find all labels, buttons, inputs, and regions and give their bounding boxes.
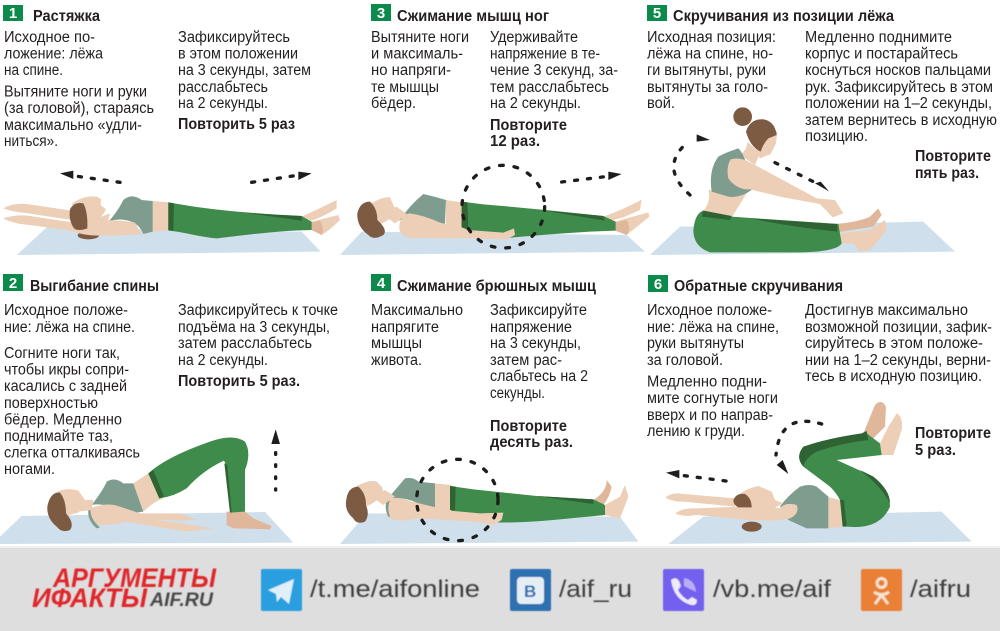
text: start position 4: напрягите <box>371 319 439 336</box>
logo: AIF: AIF.RU <box>149 590 214 611</box>
text: instructions 6: тесь в исходную позицию. <box>805 368 982 385</box>
text: hold instructions 2: подъёма на 3 секунды, <box>178 319 330 336</box>
link: odnoklassniki: /aifru <box>910 576 971 603</box>
text: hold instructions 3: на 2 секунды. <box>490 95 581 112</box>
icon: vk: В <box>524 582 536 601</box>
callout: dashed circle abdomen <box>417 459 498 541</box>
panel: exercise 3 leg muscle squeeze <box>340 4 649 255</box>
text: start position 5: вытянуты за голо- <box>647 79 768 96</box>
text: start position 6 <box>647 302 779 440</box>
text: instructions 6 <box>805 302 992 385</box>
text: start position 5: лёжа на спине, но- <box>647 46 773 62</box>
arrow: stretch left <box>60 171 120 182</box>
text: instructions 5: позицию. <box>805 128 868 145</box>
text: repeat 6 <box>915 425 991 459</box>
text: hold instructions 1: в этом положении <box>178 46 298 62</box>
text: start position 2: бёдер. Медленно <box>4 412 122 428</box>
text: start position 1 <box>4 29 154 150</box>
arrow: stretch left 6 <box>666 470 726 481</box>
text: start position 2 <box>4 302 140 478</box>
text: start position 1: ниться». <box>4 133 58 150</box>
badge 1 <box>3 5 23 22</box>
text: instructions 5: положении на 1–2 секунды, <box>805 95 992 112</box>
text: start position 3 <box>371 29 469 112</box>
text: hold instructions 3: Повторите <box>490 117 567 134</box>
text: hold instructions 1: расслабьтесь <box>178 79 268 96</box>
icon: viber <box>663 569 704 611</box>
illustration: woman seated reaching for toes <box>650 107 955 255</box>
text: hold instructions 3: напряжение в те- <box>490 46 600 62</box>
text: start position 6: мите согнутые ноги <box>647 390 778 407</box>
text: start position 2: касались с задней <box>4 378 127 395</box>
icon: telegram <box>261 569 302 611</box>
logo: AIF: ИФАКТЫ <box>32 583 148 613</box>
panel: footer band <box>0 546 1000 631</box>
illustration: woman in glute bridge <box>0 437 293 544</box>
text: start position 6: Медленно подни- <box>647 374 767 390</box>
text: start position 1: (за головой), стараясь <box>4 100 154 117</box>
arrow: curved torso rise <box>674 134 710 195</box>
text: start position 2: Исходное положе- <box>4 302 128 319</box>
text: repeat 6: Повторите <box>915 425 991 442</box>
badge 3 <box>371 4 391 22</box>
illustration: woman lying, abs squeeze <box>340 478 638 544</box>
text: start position 1: Вытяните ноги и руки <box>4 84 147 100</box>
text: start position 6: вверх и по направ- <box>647 407 773 424</box>
text: hold instructions 4: слабьтесь на 2 <box>490 368 588 385</box>
heading: exercise 4: Сжимание брюшных мышц <box>397 278 596 295</box>
text: start position 6: руки вытянуты <box>647 335 744 352</box>
badge 6: 6 <box>654 276 662 293</box>
text: start position 2: слегка отталкиваясь <box>4 444 140 462</box>
text: start position 3: и максималь- <box>371 46 463 62</box>
text: hold instructions 1: на 2 секунды. <box>178 95 268 112</box>
text: instructions 5: Медленно поднимите <box>805 29 952 46</box>
text: hold instructions 4: Зафиксируйте <box>490 302 587 319</box>
logo: AIF: АРГУМЕНТЫ <box>52 563 217 593</box>
text: start position 4: Максимально <box>371 302 463 319</box>
logo: AIF <box>32 563 217 613</box>
arrow: reach forward <box>775 163 829 191</box>
badge 5: 5 <box>653 5 661 22</box>
badge 4 <box>371 274 391 292</box>
text: hold instructions 1: Повторить 5 раз <box>178 116 295 133</box>
text: start position 2: Согните ноги так, <box>4 345 120 362</box>
illustration: woman lifting bent legs <box>665 402 972 544</box>
text: start position 1: ложение: лёжа <box>4 46 103 62</box>
illustration: woman stretching on mat <box>3 196 340 255</box>
panel: exercise 5 sit-up twist <box>647 5 997 255</box>
icon: odnoklassniki <box>861 569 902 611</box>
badge 5 <box>647 5 667 22</box>
text: hold instructions 4: Повторите <box>490 418 567 435</box>
text: instructions 6: сируйтесь в этом положе- <box>805 335 983 352</box>
text: start position 3: но напряги- <box>371 62 451 79</box>
text: start position 2: ние: лёжа на спине. <box>4 319 135 336</box>
text: hold instructions 1: Зафиксируйтесь <box>178 29 290 46</box>
icon: vk <box>510 569 551 611</box>
heading: exercise 3: Сжимание мышц ног <box>397 8 550 25</box>
text: hold instructions 2: на 2 секунды. <box>178 352 268 369</box>
text: hold instructions 4: десять раз. <box>490 434 573 451</box>
text: start position 2: поднимайте таз, <box>4 428 113 445</box>
text: start position 4: мышцы <box>371 335 422 352</box>
badge 2: 2 <box>9 275 17 292</box>
text: hold instructions 2 <box>178 302 338 390</box>
badge 2 <box>3 274 23 292</box>
text: start position 6: Исходное положе- <box>647 302 772 319</box>
heading: exercise 2: Выгибание спины <box>30 278 159 295</box>
heading: exercise 6: Обратные скручивания <box>674 278 843 295</box>
text: start position 1: Исходное по- <box>4 29 95 46</box>
text: start position 4 <box>371 302 463 369</box>
text: instructions 5 <box>805 29 997 145</box>
text: repeat 5: пять раз. <box>915 165 979 182</box>
text: start position 5: вой. <box>647 95 675 112</box>
text: hold instructions 2: затем расслабьтесь <box>178 335 312 352</box>
text: repeat 5: Повторите <box>915 148 991 165</box>
text: start position 3: Вытяните ноги <box>371 29 469 46</box>
text: repeat 5 <box>915 148 991 182</box>
arrow: curved legs toward chest <box>776 421 822 474</box>
text: start position 1: максимально «удли- <box>4 117 142 134</box>
arrow: stretch right <box>252 172 312 182</box>
text: hold instructions 2: Зафиксируйтесь к точке <box>178 302 338 319</box>
heading: exercise 5: Скручивания из позиции лёжа <box>673 8 894 25</box>
text: hold instructions 4: на 3 секунды, <box>490 335 581 352</box>
panel: exercise 6 reverse crunch <box>647 275 992 544</box>
text: start position 2: поверхностью <box>4 395 98 412</box>
text: instructions 6: нии на 1–2 секунды, верни- <box>805 352 991 369</box>
illustration: woman lying, thigh squeeze <box>340 194 649 255</box>
text: hold instructions 2: Повторить 5 раз. <box>178 373 300 390</box>
text: start position 6: ние: лёжа на спине, <box>647 319 779 336</box>
panel: exercise 1 stretch <box>3 5 340 255</box>
heading: exercise 1: Растяжка <box>33 8 100 25</box>
link: vk: /aif_ru <box>559 576 632 603</box>
badge 4: 4 <box>377 275 386 292</box>
text: hold instructions 3: чение 3 секунд, за- <box>490 62 618 79</box>
panel: exercise 4 abdominal squeeze <box>340 274 638 544</box>
text: hold instructions 1 <box>178 29 311 133</box>
text: instructions 5: корпус и постарайтесь <box>805 46 958 62</box>
text: hold instructions 4 <box>490 302 588 451</box>
link: viber: /vb.me/aif <box>713 576 831 603</box>
text: hold instructions 3: 12 раз. <box>490 133 540 150</box>
text: hold instructions 3: Удерживайте <box>490 29 578 46</box>
text: instructions 6: Достигнув максимально <box>805 302 968 319</box>
badge 3: 3 <box>377 5 385 22</box>
text: start position 3: те мышцы <box>371 79 439 96</box>
arrow: stretch right 3 <box>562 172 622 182</box>
callout: dashed circle thighs <box>462 165 545 248</box>
text: start position 5: Исходная позиция: <box>647 29 776 46</box>
text: hold instructions 4: секунды. <box>490 385 545 402</box>
badge 1: 1 <box>9 5 17 22</box>
text: instructions 5: коснуться носков пальцами <box>805 62 991 79</box>
text: start position 6: за головой. <box>647 352 723 369</box>
text: start position 5 <box>647 29 776 112</box>
badge 6 <box>648 275 668 293</box>
link: telegram: /t.me/aifonline <box>310 576 480 603</box>
text: repeat 6: 5 раз. <box>915 442 956 459</box>
panel: exercise 2 back arch <box>0 274 338 544</box>
text: start position 1: на спине. <box>4 62 63 79</box>
text: start position 4: живота. <box>371 352 422 369</box>
text: hold instructions 3: тем расслабьтесь <box>490 79 609 96</box>
text: hold instructions 4: затем рас- <box>490 352 562 369</box>
text: hold instructions 3 <box>490 29 618 150</box>
text: start position 2: ногами. <box>4 461 55 478</box>
text: hold instructions 4: напряжение <box>490 319 572 336</box>
text: start position 3: бёдер. <box>371 95 416 112</box>
text: instructions 6: возможной позиции, зафик- <box>805 319 992 336</box>
text: hold instructions 1: на 3 секунды, затем <box>178 62 311 79</box>
text: start position 5: ги вытянуты, руки <box>647 62 766 79</box>
text: start position 6: лению к груди. <box>647 423 745 440</box>
arrow: up <box>271 429 280 490</box>
text: start position 2: чтобы икры сопри- <box>4 362 129 378</box>
